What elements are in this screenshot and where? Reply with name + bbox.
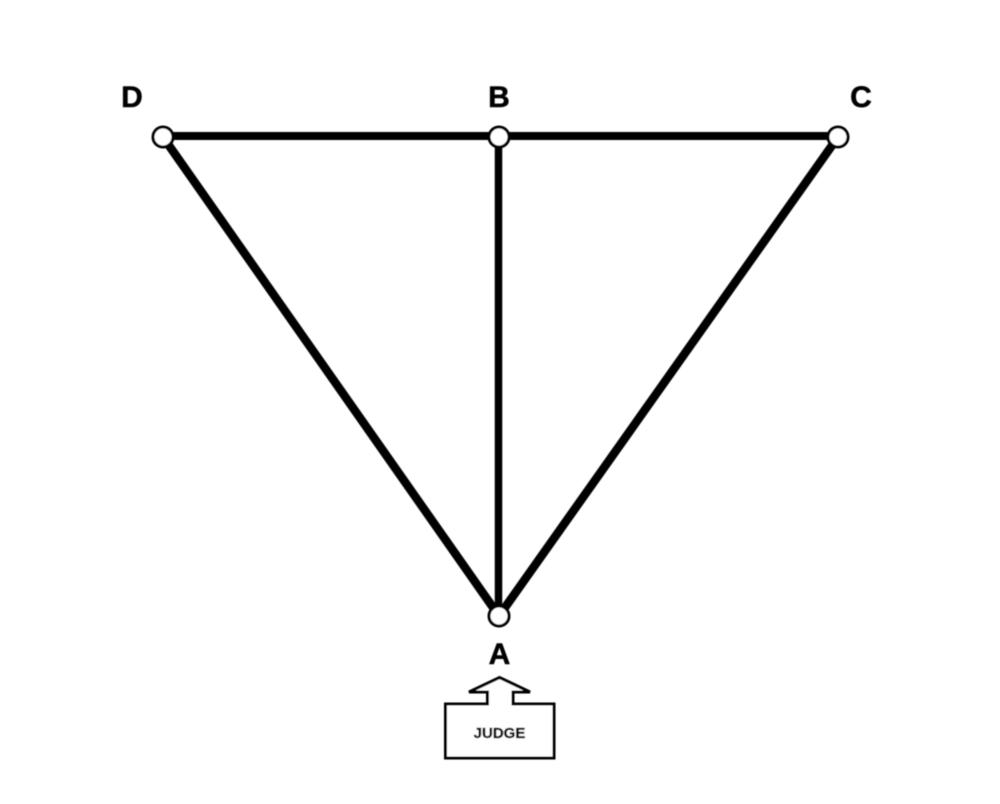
label: JUDGE: JUDGE [474, 725, 525, 742]
label: B: B [488, 81, 510, 114]
node: D [153, 127, 173, 147]
line: C to A [499, 137, 838, 616]
label: A: A [489, 638, 510, 671]
judge box with arrow [446, 678, 554, 758]
node: A [489, 606, 509, 626]
node: B [489, 127, 509, 147]
line: D to C [163, 132, 838, 140]
label: C: C [850, 81, 872, 114]
line: B to A [495, 137, 502, 616]
line: D to A [163, 137, 499, 616]
node: C [828, 127, 848, 147]
label: D: D [121, 81, 143, 114]
